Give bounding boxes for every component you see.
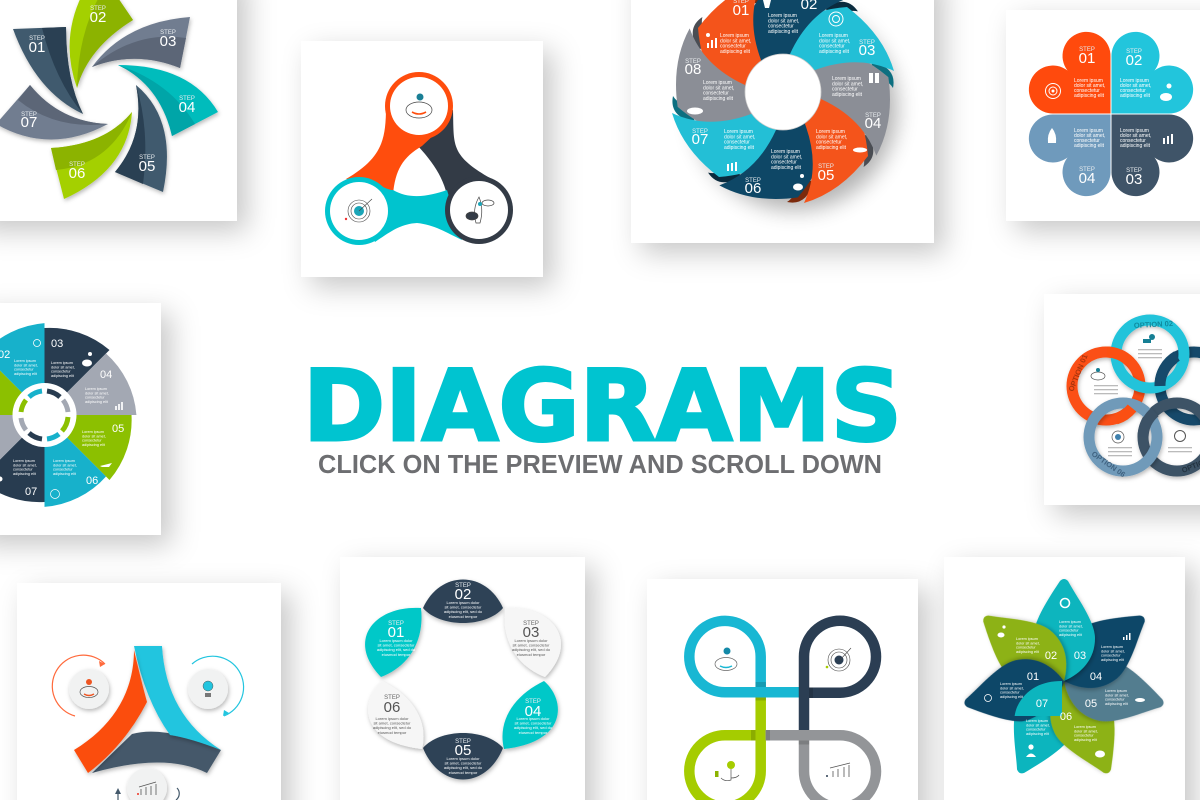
panel: seven step pinwheel <box>0 0 237 221</box>
text blocks: ring lorem: consectetur <box>724 140 750 146</box>
lens: step 03: Lorem ipsum dolor <box>514 638 548 643</box>
text blocks: wheel lorem <box>13 359 109 476</box>
labels: wheel numbers: 04 <box>100 369 112 381</box>
blade: step 06: STEP <box>69 162 85 168</box>
text blocks: ring lorem: dolor sit amet, <box>816 134 847 140</box>
lens: step 06 <box>368 681 424 749</box>
ring: option 02 cyan <box>1116 320 1184 388</box>
loop: cyan <box>689 621 799 692</box>
text blocks: wheel lorem: dolor sit amet, <box>13 463 37 467</box>
lens: step 02: eiusmod tempor <box>449 614 478 619</box>
quadrant: step 01 orange: 01 <box>1079 50 1095 67</box>
icons: petals <box>984 598 1145 758</box>
quadrant: step 03 navy: Lorem ipsum <box>1120 128 1149 134</box>
overlap: orange over cyan <box>1107 352 1130 362</box>
text blocks: petal lorem: Lorem ipsum <box>1000 682 1022 686</box>
option labels: OPTION 01 <box>1067 353 1090 393</box>
sector: 03 navy <box>44 328 110 400</box>
blade: step 05 <box>804 84 868 203</box>
loop: navy <box>804 621 876 730</box>
lens: step 03: eiusmod tempor <box>517 652 546 657</box>
text blocks: ring lorem: Lorem ipsum <box>703 80 732 86</box>
text blocks: wheel lorem: Lorem ipsum <box>85 387 107 391</box>
petal: step 01 <box>958 651 1071 733</box>
panel: interlocked rings <box>1044 294 1200 505</box>
labels: ring steps: 05 <box>818 167 834 184</box>
blade: step 03 <box>775 7 894 71</box>
petal: step 02 <box>965 593 1083 705</box>
sector: 07 navy <box>0 430 44 502</box>
quadrant: step 02 cyan: adipiscing elit <box>1120 93 1151 99</box>
quadrant: step 04 blue grey: dolor sit amet, <box>1074 133 1105 139</box>
lens: step 04 <box>502 681 558 749</box>
text blocks: ring lorem: adipiscing elit <box>819 49 850 55</box>
text blocks: petal lorem: Lorem ipsum <box>1074 725 1096 729</box>
blade: step 02 <box>717 0 847 83</box>
lens: step 06: 06 <box>384 699 400 716</box>
quadrant: step 04 blue grey: Lorem ipsum <box>1074 128 1103 134</box>
text blocks: petal lorem: Lorem ipsum <box>1059 620 1081 624</box>
ring shadow <box>693 6 897 210</box>
lens: step 01: 01 <box>388 624 404 641</box>
lens: step 05: 05 <box>455 742 471 759</box>
text blocks: petal lorem: adipiscing elit <box>1016 650 1040 654</box>
text blocks: ring lorem: Lorem ipsum <box>720 33 749 39</box>
quadrant: step 01 orange: Lorem ipsum <box>1074 78 1103 84</box>
quadrant: step 03 navy: consectetur <box>1120 138 1146 144</box>
blade folds <box>672 0 894 203</box>
text blocks: petal lorem: consectetur <box>1000 691 1020 695</box>
panel: four loop knot <box>647 579 918 800</box>
labels: ring steps: 01 <box>733 2 749 19</box>
petal: step 03 <box>1034 579 1095 681</box>
quadrant: step 03 navy <box>1111 114 1193 196</box>
text blocks: petal lorem: consectetur <box>1105 698 1125 702</box>
panel: six lens ring <box>340 557 585 800</box>
labels: ring steps: STEP <box>745 178 761 184</box>
text blocks: petal lorem: consectetur <box>1016 646 1036 650</box>
lens: step 01: STEP <box>388 621 404 627</box>
text blocks: wheel lorem: consectetur <box>13 468 33 472</box>
text blocks: wheel lorem: dolor sit amet, <box>53 463 77 467</box>
sector: 04 grey <box>55 353 152 450</box>
text blocks: petal lorem: adipiscing elit <box>1059 633 1083 637</box>
labels: petal numbers: 07 <box>1036 698 1048 710</box>
text blocks: wheel lorem: consectetur <box>82 439 102 443</box>
ribbon: cyan <box>134 646 221 750</box>
blade overlap: step 02 over 03 <box>775 0 843 54</box>
text blocks: wheel lorem: adipiscing elit <box>82 443 106 447</box>
lens: step 06: sit amet, consectetur <box>374 721 411 726</box>
loop: lime <box>689 692 761 800</box>
text blocks: ring lorem: dolor sit amet, <box>832 81 863 87</box>
icons: wheel <box>0 340 123 498</box>
text blocks: ring lorem: Lorem ipsum <box>819 33 848 39</box>
panel: ribbon triangle <box>17 583 281 800</box>
icon: piggy bank <box>715 648 737 670</box>
text blocks: wheel lorem: adipiscing elit <box>53 472 77 476</box>
quadrant: step 01 orange: STEP <box>1079 47 1095 53</box>
lens: step 01 <box>365 608 422 677</box>
petal: step 04 <box>1045 594 1163 705</box>
text blocks: ring lorem: adipiscing elit <box>724 145 755 151</box>
blade: step 03: STEP <box>160 30 176 36</box>
icon: growth chart <box>137 782 156 795</box>
lens: step 05: adipiscing elit, sed do <box>444 765 483 770</box>
text blocks: ring lorem: adipiscing elit <box>771 165 802 171</box>
labels: wheel numbers: 03 <box>51 338 63 350</box>
overlap: dark over blue grey <box>1143 412 1155 437</box>
quadrant: step 04 blue grey: adipiscing elit <box>1074 143 1105 149</box>
text blocks: petal lorem: adipiscing elit <box>1000 695 1024 699</box>
text blocks: petal lorem: Lorem ipsum <box>1101 645 1123 649</box>
text blocks: wheel lorem: dolor sit amet, <box>14 363 38 367</box>
text blocks: ring lorem: adipiscing elit <box>720 49 751 55</box>
node: target <box>325 177 393 245</box>
option labels: OPTION 02 <box>1134 319 1173 330</box>
crossing shade <box>751 682 813 744</box>
icon: cloud and rocket <box>466 197 494 223</box>
text blocks: ring lorem: dolor sit amet, <box>703 85 734 91</box>
labels: wheel numbers <box>0 338 124 498</box>
ring: option 06 blue grey <box>1089 403 1157 471</box>
option labels <box>1067 319 1200 479</box>
text blocks: petal lorem: adipiscing elit <box>1101 658 1125 662</box>
lens: step 05: eiusmod tempor <box>449 770 478 775</box>
lens: step 01: Lorem ipsum dolor <box>379 638 413 643</box>
petal overlap: step 07 over 01 <box>1014 681 1062 716</box>
text blocks: ring lorem: Lorem ipsum <box>816 129 845 135</box>
blade: step 03 <box>92 17 190 68</box>
text blocks: wheel lorem: adipiscing elit <box>85 400 109 404</box>
lens: step 02 <box>423 580 503 623</box>
quadrant: step 02 cyan <box>1111 32 1193 114</box>
blade: step 04: 04 <box>179 99 195 116</box>
labels: wheel numbers: 07 <box>25 486 37 498</box>
quadrant: step 02 cyan: STEP <box>1126 49 1142 55</box>
labels: ring steps: 03 <box>859 42 875 59</box>
blade: step 06 <box>51 112 132 199</box>
labels: ring steps: 06 <box>745 180 761 197</box>
sector: 05 green <box>60 415 132 480</box>
blade: step 05: STEP <box>139 155 155 161</box>
lens: step 03: 03 <box>523 624 539 641</box>
labels: petal numbers: 03 <box>1074 650 1086 662</box>
text blocks: wheel lorem: consectetur <box>85 396 105 400</box>
loop: grey <box>766 735 876 800</box>
text blocks: ring lorem: consectetur <box>816 140 842 146</box>
text blocks: ring lorem: Lorem ipsum <box>724 129 753 135</box>
lens: step 03: sit amet, consectetur <box>513 643 550 648</box>
quadrant: step 02 cyan: dolor sit amet, <box>1120 83 1151 89</box>
labels: petal numbers: 02 <box>1045 650 1057 662</box>
text blocks: ring lorem: consectetur <box>768 24 794 30</box>
blade: step 06 <box>719 101 849 231</box>
ring: option 05 dark <box>1143 403 1200 471</box>
ribbon: orange <box>74 650 147 773</box>
text blocks: petal lorem: adipiscing elit <box>1074 738 1098 742</box>
quadrant: step 04 blue grey: consectetur <box>1074 138 1100 144</box>
text blocks: wheel lorem: adipiscing elit <box>51 374 75 378</box>
small texts and icons in rings <box>1091 334 1192 456</box>
quadrant: step 02 cyan: consectetur <box>1120 88 1146 94</box>
ring: option 01 orange <box>1072 352 1140 420</box>
labels: wheel numbers: 05 <box>112 423 124 435</box>
sector: 02 cyan <box>0 307 80 404</box>
text blocks: petal lorem: dolor sit amet, <box>1026 723 1050 727</box>
lens: step 03: adipiscing elit, sed do <box>512 647 551 652</box>
text blocks: wheel lorem: dolor sit amet, <box>85 391 109 395</box>
blade: step 01: 01 <box>29 39 45 56</box>
lens: step 04: 04 <box>525 703 541 720</box>
quadrant: step 04 blue grey <box>1029 114 1111 196</box>
text blocks: ring lorem: Lorem ipsum <box>832 76 861 82</box>
lens: step 04: Lorem ipsum dolor <box>516 716 550 721</box>
lens: step 01: adipiscing elit, sed do <box>377 647 416 652</box>
text blocks: petal lorem: consectetur <box>1101 654 1121 658</box>
panel: three loop piggy diagram <box>301 41 543 277</box>
blade: step 01 <box>698 0 762 100</box>
text blocks: ring lorem: adipiscing elit <box>816 145 847 151</box>
quadrant: step 01 orange <box>1029 32 1111 114</box>
quadrant: step 03 navy: adipiscing elit <box>1120 143 1151 149</box>
text blocks: petal lorem: Lorem ipsum <box>1026 719 1048 723</box>
text blocks: ring lorem: consectetur <box>720 44 746 50</box>
ring: option 03 navy <box>1160 352 1200 420</box>
blade: step 01: STEP <box>29 36 45 42</box>
blade: step 05 <box>115 85 167 192</box>
text blocks: wheel lorem: adipiscing elit <box>13 472 37 476</box>
text blocks: wheel lorem: Lorem ipsum <box>14 359 36 363</box>
panel: eight sector wheel <box>0 303 161 535</box>
blade: step 03: 03 <box>160 33 176 50</box>
band: navy connector <box>400 110 500 215</box>
labels: ring steps: 04 <box>865 115 881 132</box>
text blocks: ring lorem: dolor sit amet, <box>724 134 755 140</box>
lens: step 06: adipiscing elit, sed do <box>373 725 412 730</box>
text blocks: ring lorem: Lorem ipsum <box>771 149 800 155</box>
text blocks: petal lorem: adipiscing elit <box>1026 732 1050 736</box>
petal: step 06 <box>1036 668 1135 786</box>
blade: step 04: STEP <box>179 96 195 102</box>
blade: step 08 <box>644 28 774 158</box>
text blocks: wheel lorem: consectetur <box>53 468 73 472</box>
lens: step 01: sit amet, consectetur <box>378 643 415 648</box>
lens: step 05: sit amet, consectetur <box>445 761 482 766</box>
option labels: OPTION 06 <box>1090 449 1127 479</box>
icon: bulb <box>203 681 213 697</box>
icon: piggy bank <box>406 94 432 118</box>
labels: petal numbers <box>1027 650 1102 723</box>
lens: step 02: STEP <box>455 583 471 589</box>
quadrant: step 04 blue grey: 04 <box>1079 170 1095 187</box>
lens: step 03 <box>504 608 561 677</box>
text blocks: petal lorem: dolor sit amet, <box>1000 686 1024 690</box>
lens: step 02: adipiscing elit, sed do <box>444 609 483 614</box>
node: bulb with arrow <box>188 656 244 716</box>
text blocks: petal lorem: Lorem ipsum <box>1016 637 1038 641</box>
labels: ring steps: 07 <box>692 131 708 148</box>
blade: step 02: 02 <box>90 9 106 26</box>
quadrant: step 02 cyan: Lorem ipsum <box>1120 78 1149 84</box>
blade: step 07: 07 <box>21 114 37 131</box>
labels: petal numbers: 04 <box>1090 671 1102 683</box>
labels: ring steps: STEP <box>859 40 875 46</box>
text blocks: ring lorem: adipiscing elit <box>832 92 863 98</box>
overlap: navy over cyan <box>1160 356 1177 386</box>
panel: seven petal flower <box>944 557 1185 800</box>
labels: petal numbers: 06 <box>1060 711 1072 723</box>
text blocks: petal lorem: dolor sit amet, <box>1016 641 1040 645</box>
centre hole <box>745 54 821 130</box>
labels: ring steps: STEP <box>818 164 834 170</box>
text blocks: ring lorem: consectetur <box>819 44 845 50</box>
quadrant: step 03 navy: STEP <box>1126 168 1142 174</box>
lens: step 04: adipiscing elit, sed do <box>514 725 553 730</box>
blade: step 02: STEP <box>90 6 106 12</box>
text blocks: ring lorem: Lorem ipsum <box>768 13 797 19</box>
text blocks: wheel lorem: Lorem ipsum <box>82 430 104 434</box>
labels: petal numbers: 05 <box>1085 698 1097 710</box>
text blocks: ring lorem: adipiscing elit <box>703 96 734 102</box>
blade: step 07: STEP <box>21 112 37 118</box>
lens: step 04: sit amet, consectetur <box>515 721 552 726</box>
text blocks: petal lorem: consectetur <box>1026 728 1046 732</box>
sector: 06 cyan <box>9 426 106 523</box>
text blocks: ring lorem: consectetur <box>771 160 797 166</box>
quadrant: step 01 orange: dolor sit amet, <box>1074 83 1105 89</box>
lens: step 05 <box>423 733 503 780</box>
icons: ring <box>687 0 879 190</box>
labels: ring steps: 08 <box>685 61 701 78</box>
text blocks: wheel lorem: Lorem ipsum <box>53 459 75 463</box>
text blocks: wheel lorem: Lorem ipsum <box>13 459 35 463</box>
lens: step 02: Lorem ipsum dolor <box>446 600 480 605</box>
text blocks: wheel lorem: Lorem ipsum <box>51 361 73 365</box>
subtitle: CLICK ON THE PREVIEW AND SCROLL DOWN <box>318 451 882 479</box>
icon: coin plant <box>715 761 739 781</box>
petal: step 05 <box>1057 652 1170 734</box>
title: DIAGRAMS <box>303 350 902 464</box>
panel: four step clover <box>1006 10 1200 221</box>
node: piggy with arrow <box>52 655 109 716</box>
text blocks: wheel lorem: dolor sit amet, <box>51 365 75 369</box>
labels: petal numbers: 01 <box>1027 671 1039 683</box>
lens: step 02: sit amet, consectetur <box>445 605 482 610</box>
panel: eight step ring <box>631 0 934 243</box>
blade: step 05: 05 <box>139 158 155 175</box>
text blocks: wheel lorem: adipiscing elit <box>14 372 38 376</box>
blade: step 02 <box>70 0 133 88</box>
overlap: orange over blue grey <box>1116 408 1132 419</box>
blade: step 07 <box>672 113 791 177</box>
labels: ring steps <box>685 0 881 197</box>
text blocks: wheel lorem: consectetur <box>14 368 34 372</box>
blade: step 06: 06 <box>69 165 85 182</box>
text blocks: ring lorem: dolor sit amet, <box>768 18 799 24</box>
band: orange connector <box>346 106 450 195</box>
icon: target <box>345 199 372 222</box>
text blocks: ring lorem <box>703 13 863 171</box>
sector: 08 grey <box>0 380 34 477</box>
text blocks: petal lorem: dolor sit amet, <box>1101 649 1125 653</box>
ribbon: navy <box>92 732 221 773</box>
text blocks: petal lorem: dolor sit amet, <box>1105 693 1129 697</box>
petal: step 07 <box>992 668 1091 786</box>
lens: step 01: eiusmod tempor <box>382 652 411 657</box>
icon: growth chart <box>826 763 850 777</box>
lens: step 06: eiusmod tempor <box>378 730 407 735</box>
labels: ring steps: STEP <box>685 59 701 65</box>
text blocks: petal lorem: adipiscing elit <box>1105 702 1129 706</box>
quadrant: step 03 navy: 03 <box>1126 171 1142 188</box>
lens: step 03: STEP <box>523 621 539 627</box>
text blocks: ring lorem: adipiscing elit <box>768 29 799 35</box>
quadrant: step 03 navy: dolor sit amet, <box>1120 133 1151 139</box>
text blocks: ring lorem: dolor sit amet, <box>819 38 850 44</box>
lens: step 04: eiusmod tempor <box>519 730 548 735</box>
quadrant: step 04 blue grey: STEP <box>1079 167 1095 173</box>
quadrant: step 01 orange: adipiscing elit <box>1074 93 1105 99</box>
lens: step 06: Lorem ipsum dolor <box>375 716 409 721</box>
labels: ring steps: STEP <box>692 129 708 135</box>
text blocks: petal lorem: consectetur <box>1059 629 1079 633</box>
lens: step 04: STEP <box>525 699 541 705</box>
text blocks: wheel lorem: consectetur <box>51 370 71 374</box>
node: chart with arrow <box>115 768 179 800</box>
quadrant: step 01 orange: consectetur <box>1074 88 1100 94</box>
centre ring <box>12 383 76 447</box>
text blocks: petal lorem: dolor sit amet, <box>1074 729 1098 733</box>
text blocks: ring lorem: consectetur <box>832 87 858 93</box>
lens: step 05: STEP <box>455 739 471 745</box>
lens: step 06: STEP <box>384 695 400 701</box>
icons: clover <box>1046 84 1173 144</box>
icon: target <box>826 648 851 671</box>
node: piggy bank <box>385 72 453 140</box>
lens: step 02: 02 <box>455 586 471 603</box>
text blocks: ring lorem: consectetur <box>703 91 729 97</box>
text blocks: ring lorem: dolor sit amet, <box>720 38 751 44</box>
node: rocket launch <box>445 176 513 244</box>
text blocks: petal lorem: consectetur <box>1074 734 1094 738</box>
labels: ring steps: STEP <box>865 113 881 119</box>
sector: 01 green <box>0 350 30 415</box>
text blocks: petal lorem: Lorem ipsum <box>1105 689 1127 693</box>
text blocks: ring lorem: dolor sit amet, <box>771 154 802 160</box>
text blocks: petal lorem <box>1000 620 1129 742</box>
blade: step 04 <box>792 26 922 156</box>
text blocks: petal lorem: dolor sit amet, <box>1059 624 1083 628</box>
text blocks: wheel lorem: dolor sit amet, <box>82 434 106 438</box>
quadrant: step 02 cyan: 02 <box>1126 52 1142 69</box>
icon: piggy bank <box>80 679 98 698</box>
lens: step 05: Lorem ipsum dolor <box>446 756 480 761</box>
labels: wheel numbers: 06 <box>86 475 98 487</box>
blade: step 07 <box>0 85 108 140</box>
blade: step 01 <box>13 27 83 114</box>
blade: step 04 <box>118 65 218 136</box>
band: teal connector <box>350 178 462 242</box>
